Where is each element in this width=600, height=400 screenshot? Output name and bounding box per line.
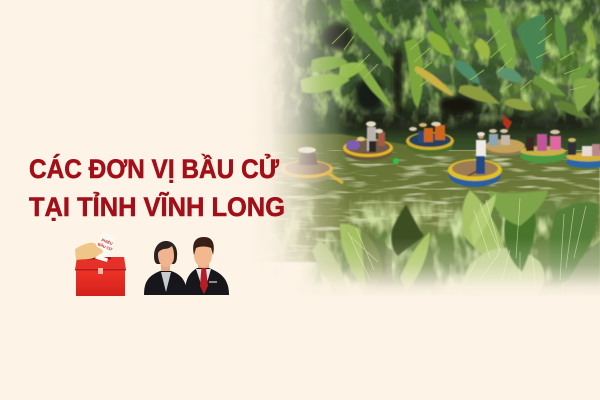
coracle boat 5 [520, 130, 566, 163]
slot [87, 258, 111, 259]
box lid [75, 257, 126, 270]
dark gaps between palms [323, 23, 478, 115]
voting slip [94, 232, 117, 262]
title: TẠI TỈNH VĨNH LONG [29, 192, 285, 222]
coracle boat 4 [485, 115, 525, 156]
box lock [98, 268, 103, 274]
green buoy [393, 158, 399, 164]
bottom edge fade [250, 238, 600, 298]
voting slip: PHIẾU [101, 237, 114, 246]
palm forest backdrop [250, 0, 600, 150]
solid cream page background left of the photo [0, 0, 250, 400]
voting slip: BẦU CỬ [97, 241, 114, 252]
water [250, 134, 600, 262]
left edge fade [250, 0, 350, 304]
title [29, 154, 285, 222]
faded coracle boat [281, 147, 343, 183]
hand holding the slip [75, 243, 103, 260]
coracle boat 6 [566, 138, 600, 168]
foreground palm fronds [280, 190, 600, 292]
coracle boat 3 [406, 122, 454, 154]
box body [76, 270, 125, 296]
woman [144, 241, 187, 295]
frond ribs [348, 198, 586, 290]
solid cream page background below the photo [0, 298, 600, 400]
man [185, 237, 229, 295]
icon: ballot box with voting slip [75, 232, 126, 296]
frond feathers [332, 18, 586, 92]
infographic canvas [29, 0, 600, 296]
title: CÁC ĐƠN VỊ BẦU CỬ [29, 154, 279, 184]
photo: river with palms and coracle boats [270, 0, 600, 292]
icon: woman and man delegates [144, 237, 229, 295]
coracle boat 2 [343, 121, 393, 161]
main coracle with standing boatman [448, 132, 502, 187]
palm leaves [300, 0, 600, 118]
